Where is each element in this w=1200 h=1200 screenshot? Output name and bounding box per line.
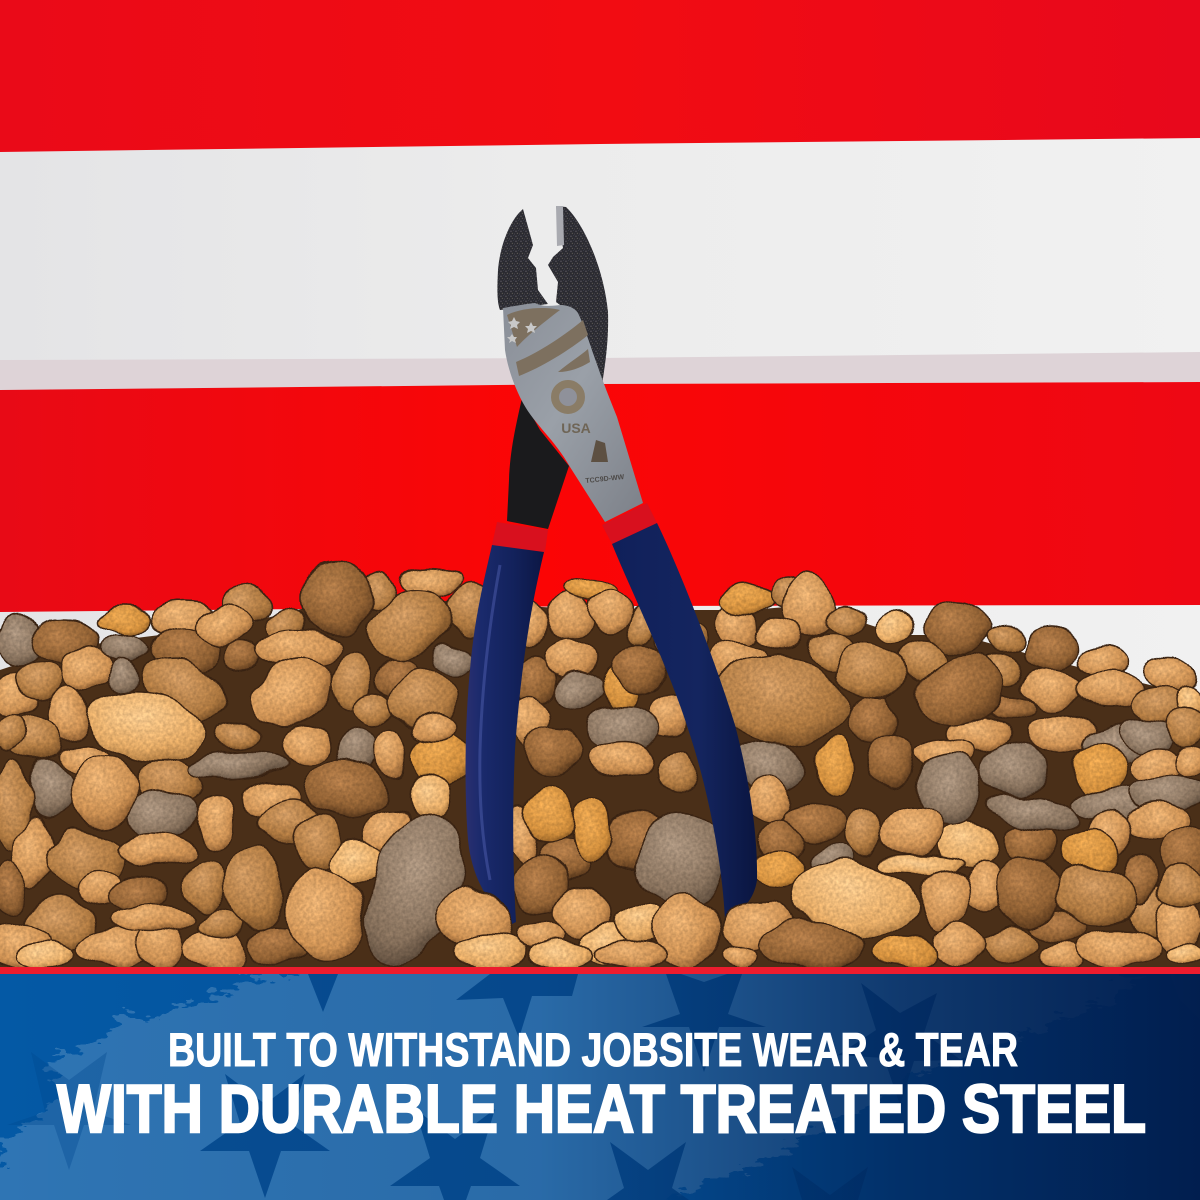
rock pile: large foreground stones	[67, 562, 1161, 978]
left blue grip	[466, 545, 544, 925]
left grip highlight	[480, 565, 500, 880]
background stars	[7, 974, 961, 1200]
right blue grip	[612, 523, 757, 920]
rear lever	[507, 398, 569, 529]
red accent strip	[0, 967, 1200, 974]
rock pile: rear stones	[0, 567, 1200, 970]
banner background	[0, 974, 1200, 1200]
right red sleeve	[602, 503, 657, 544]
banner: blue gradient with stars and headline	[0, 967, 1200, 1200]
background: american flag stripes	[0, 0, 1200, 700]
rear jaw, right side	[548, 206, 608, 386]
rock pile: stones in front of grips	[429, 881, 939, 976]
front steel lever with engraving	[503, 303, 643, 522]
brush stroke texture	[0, 974, 1148, 1200]
left red sleeve	[492, 522, 548, 552]
front steel lever with engraving: TCC9D-WW	[585, 474, 625, 485]
rock pile base shadow	[0, 600, 1200, 968]
silver cutter edge	[556, 206, 564, 246]
rear jaw, left side	[497, 209, 548, 310]
headline line one: BUILT TO WITHSTAND JOBSITE WEAR & TEAR	[168, 1023, 1018, 1076]
front steel lever with engraving: USA	[561, 420, 591, 436]
hand tool: crimping pliers	[466, 206, 757, 925]
right side darkening	[0, 974, 1200, 1200]
